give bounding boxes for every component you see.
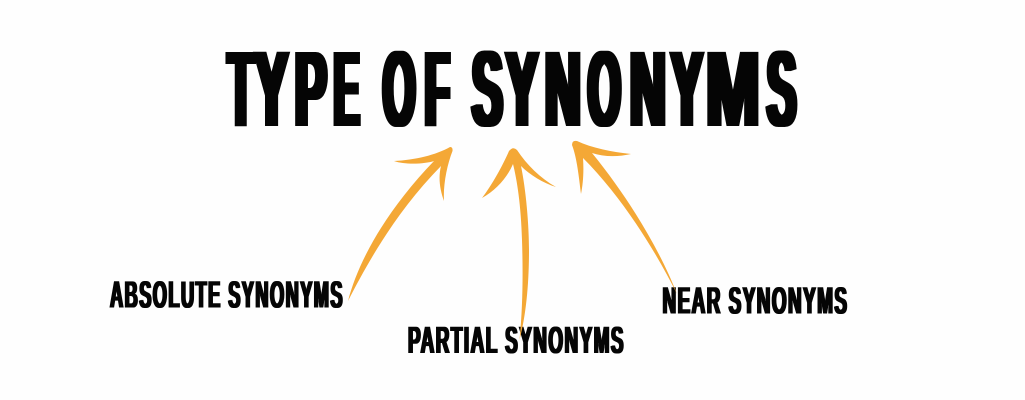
title: Y [255, 28, 288, 149]
title: T [228, 28, 254, 149]
text: ABSOLUTE SYNONYMS [110, 274, 344, 316]
title: O [588, 28, 621, 149]
title: S [767, 28, 797, 149]
arrow: absolute synonyms to title [348, 147, 453, 301]
title: N [630, 28, 665, 149]
title: F [425, 28, 449, 149]
arrow: near synonyms to title [572, 141, 677, 294]
title: N [545, 28, 580, 149]
arrow: partial synonyms to title [482, 148, 556, 340]
text: PARTIAL SYNONYMS [408, 320, 625, 362]
title: S [472, 28, 503, 149]
title: Y [671, 28, 703, 149]
title: Y [506, 28, 538, 149]
title: M [706, 28, 759, 149]
title: E [334, 28, 359, 149]
title [225, 28, 798, 149]
title: P [295, 28, 326, 149]
title: O [383, 28, 416, 149]
